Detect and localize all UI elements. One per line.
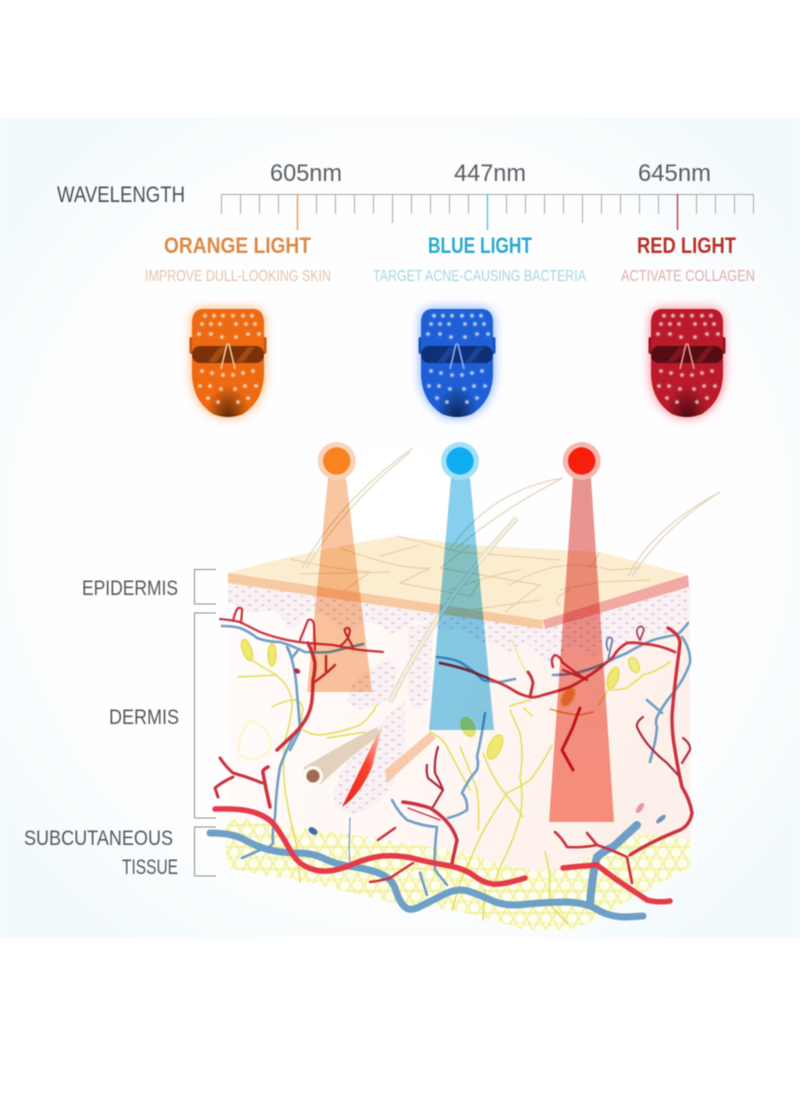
bracket: dermis: [194, 613, 216, 818]
description: blue light: TARGET ACNE-CAUSING BACTERIA: [373, 268, 586, 285]
heading: blue light: BLUE LIGHT: [428, 233, 532, 258]
light beam: red: [549, 478, 614, 822]
skin edge: right face: [543, 575, 689, 629]
bracket: subcutaneous: [194, 827, 216, 876]
surface cracks: [290, 536, 650, 612]
bracket: epidermis: [194, 570, 216, 604]
yellow nerve fibres: [238, 638, 670, 923]
layer label: subcutaneous tissue: TISSUE: [122, 856, 178, 879]
light source: blue: [441, 442, 479, 480]
heading: orange light: ORANGE LIGHT: [164, 233, 311, 258]
layer label: dermis: DERMIS: [109, 706, 179, 729]
hair strands: [302, 448, 720, 702]
description: red light: ACTIVATE COLLAGEN: [621, 268, 755, 285]
wavelength value: 605nm: 605nm: [270, 160, 342, 187]
hair follicle: [303, 700, 436, 813]
layer label: epidermis: EPIDERMIS: [82, 577, 178, 600]
red arteries: [215, 608, 692, 883]
thick red artery: [215, 809, 670, 902]
wavelength label: WAVELENGTH: [57, 182, 185, 207]
light beam: blue: [429, 478, 494, 730]
wavelength value: 645nm: 645nm: [638, 160, 711, 187]
icon: blue mask: [418, 309, 496, 417]
icon: red mask: [648, 309, 726, 417]
dermis body: [228, 585, 690, 880]
blue veins: [222, 623, 690, 895]
dotted gland patches: [348, 658, 398, 709]
skin cross-section: [226, 536, 690, 930]
skin edge: left face: [228, 573, 543, 629]
light source: orange: [318, 442, 356, 480]
light source: red: [563, 442, 601, 480]
layer label: subcutaneous tissue: SUBCUTANEOUS: [24, 827, 173, 850]
heading: red light: RED LIGHT: [637, 233, 736, 258]
small vessel cross-sections: [293, 667, 667, 836]
layer label: subcutaneous tissue: [24, 827, 178, 879]
icon: orange mask: [190, 309, 266, 417]
subcutaneous fat layer: [226, 818, 690, 930]
thick blue vein: [210, 825, 643, 917]
light beam: orange: [307, 478, 372, 692]
skin surface: [228, 536, 688, 620]
wavelength value: 447nm: 447nm: [454, 160, 526, 187]
wavelength ruler: [221, 194, 754, 230]
background panel: [0, 118, 800, 937]
epidermis dotted layer: [228, 583, 690, 663]
description: orange light: IMPROVE DULL-LOOKING SKIN: [145, 268, 331, 285]
